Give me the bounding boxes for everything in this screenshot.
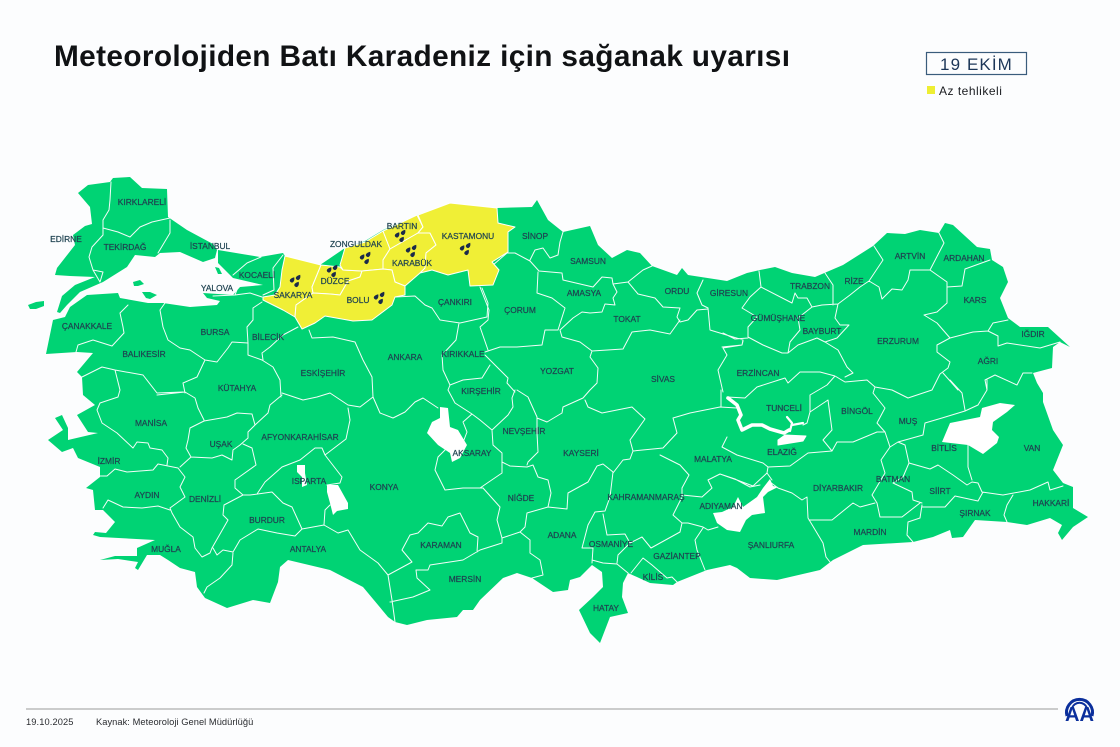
province labels: KARAMAN (420, 540, 462, 550)
province labels: İZMİR (98, 456, 120, 466)
province labels: SİİRT (929, 486, 951, 496)
province: Karabük (383, 233, 436, 286)
province labels: ERZİNCAN (737, 368, 779, 378)
province labels: UŞAK (210, 439, 233, 449)
province labels: YALOVA (201, 283, 234, 293)
province labels: DENİZLİ (189, 494, 221, 504)
province labels: MALATYA (694, 454, 732, 464)
province labels: SAKARYA (274, 290, 313, 300)
province labels: ÇORUM (504, 305, 536, 315)
lake: Tuz (427, 407, 467, 462)
province labels: ANTALYA (290, 544, 327, 554)
province labels: HAKKARİ (1033, 498, 1069, 508)
province labels: AKSARAY (453, 448, 492, 458)
province labels: MERSİN (449, 574, 481, 584)
province labels: DİYARBAKIR (813, 483, 863, 493)
province: Zonguldak (340, 231, 390, 271)
footer: 19.10.2025 (26, 717, 74, 727)
province labels: ESKİŞEHİR (301, 368, 345, 378)
province labels: BİTLİS (931, 443, 957, 453)
province labels: ŞANLIURFA (748, 540, 795, 550)
province labels: BİLECİK (252, 332, 284, 342)
province labels: IĞDIR (1021, 329, 1045, 339)
province labels: KAYSERİ (563, 448, 599, 458)
lake: Eğirdir (297, 465, 307, 487)
lake: Van (942, 403, 1015, 454)
province labels: KIRŞEHİR (461, 386, 501, 396)
province labels: ERZURUM (877, 336, 919, 346)
rain icon: Kastamonu (460, 243, 470, 255)
province labels: AĞRI (978, 356, 998, 366)
province labels: TUNCELİ (766, 403, 802, 413)
lake: Atatürk (713, 479, 778, 532)
province: Kastamonu (418, 203, 515, 286)
province labels: KARABÜK (392, 258, 432, 268)
province labels: MARDİN (853, 527, 887, 537)
rain icon: Bartın (395, 230, 405, 242)
rain icon: Düzce (327, 265, 337, 277)
province labels: ŞIRNAK (959, 508, 991, 518)
province labels: İSTANBUL (190, 241, 231, 251)
province labels: KARS (964, 295, 987, 305)
province labels: BARTIN (387, 221, 417, 231)
province labels: GİRESUN (710, 288, 748, 298)
province labels: NİĞDE (508, 493, 535, 503)
province labels: KÜTAHYA (218, 383, 257, 393)
province labels: ÇANKIRI (438, 297, 472, 307)
map of Turkey (28, 177, 1088, 643)
province labels: EDİRNE (50, 234, 82, 244)
province labels: TRABZON (790, 281, 830, 291)
islands (28, 267, 222, 309)
land: Thrace (55, 177, 217, 313)
province labels: TEKİRDAĞ (104, 242, 146, 252)
province labels: BURDUR (249, 515, 285, 525)
footer: Kaynak: Meteoroloji Genel Müdürlüğü (96, 717, 253, 727)
lake: Keban (728, 398, 806, 445)
rain icon: Karabük (406, 245, 416, 257)
province labels: ARDAHAN (944, 253, 984, 263)
province labels: AYDIN (135, 490, 159, 500)
province labels: ORDU (665, 286, 689, 296)
province: Bartın (383, 215, 423, 249)
province labels: BİNGÖL (841, 406, 873, 416)
province labels: KAHRAMANMARAŞ (607, 492, 685, 502)
title: Meteorolojiden Batı Karadeniz için sağanak uyarısı (54, 40, 790, 73)
province labels: GAZİANTEP (653, 551, 701, 561)
province labels: BAYBURT (803, 326, 841, 336)
province labels: VAN (1024, 443, 1040, 453)
province labels: NEVŞEHİR (503, 426, 545, 436)
land: Anatolia (46, 200, 1088, 643)
province labels: KASTAMONU (442, 231, 494, 241)
province labels: RİZE (844, 276, 864, 286)
province labels: MUĞLA (151, 544, 181, 554)
date box: 19 EKİM (940, 55, 1013, 74)
province labels: AMASYA (567, 288, 602, 298)
rain icon: Sakarya (290, 275, 300, 287)
province labels: ELAZIĞ (767, 447, 797, 457)
province labels: ZONGULDAK (330, 239, 382, 249)
province labels: KIRKLARELİ (118, 197, 166, 207)
province: Bolu (295, 269, 405, 329)
province labels: MUŞ (899, 416, 918, 426)
AA logo: AA (1065, 704, 1094, 726)
province labels: OSMANİYE (589, 539, 634, 549)
province labels: KOCAELİ (239, 270, 275, 280)
province labels: BOLU (347, 295, 369, 305)
province labels: DÜZCE (321, 276, 350, 286)
province: Düzce (312, 265, 362, 295)
legend: Az tehlikeli (939, 84, 1002, 98)
province labels: GÜMÜŞHANE (751, 313, 806, 323)
province labels: ARTVİN (895, 251, 925, 261)
province labels: KONYA (370, 482, 399, 492)
province labels: SİVAS (651, 374, 675, 384)
province labels: BALIKESİR (122, 349, 166, 359)
province labels: YOZGAT (540, 366, 574, 376)
province labels: ANKARA (388, 352, 423, 362)
rain icon: Zonguldak (360, 252, 370, 264)
province borders (76, 182, 1063, 622)
province labels: ISPARTA (292, 476, 327, 486)
province labels: MANİSA (135, 418, 167, 428)
province labels: SİNOP (522, 231, 548, 241)
province labels: ÇANAKKALE (62, 321, 113, 331)
province labels: KIRIKKALE (441, 349, 485, 359)
province labels: AFYONKARAHİSAR (261, 432, 339, 442)
province labels: ADIYAMAN (699, 501, 743, 511)
province labels: ADANA (548, 530, 577, 540)
footer (26, 709, 1058, 727)
province labels: HATAY (593, 603, 619, 613)
province labels: BATMAN (876, 474, 910, 484)
rain icon: Bolu (374, 292, 384, 304)
lake: Beyşehir (327, 485, 348, 515)
province labels: TOKAT (613, 314, 641, 324)
province labels: BURSA (201, 327, 230, 337)
date box (926, 52, 1026, 74)
province labels: KİLİS (643, 572, 664, 582)
province labels (50, 197, 1069, 613)
province labels: SAMSUN (570, 256, 606, 266)
province: Sakarya (263, 256, 321, 317)
